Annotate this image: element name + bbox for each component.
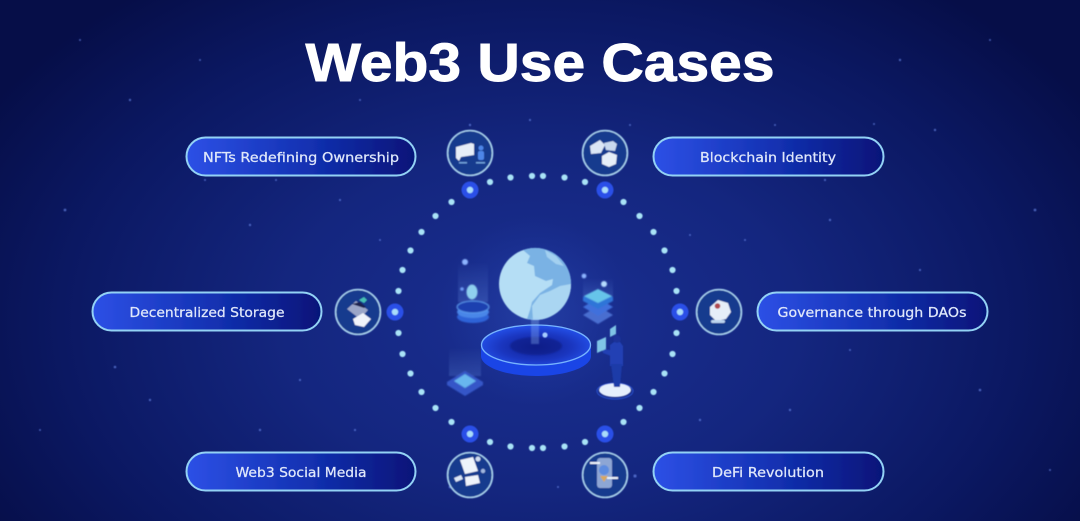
pill: Blockchain Identity: Blockchain Identity: [700, 151, 836, 166]
icon: blockchain cubes: [582, 130, 628, 176]
platform: [481, 325, 591, 376]
halo: [440, 215, 630, 405]
pill: Decentralized Storage: [92, 292, 322, 330]
pill: DeFi Revolution: [654, 452, 884, 490]
light beam: [531, 318, 539, 344]
central illustration: [440, 215, 633, 405]
pill: Blockchain Identity: [654, 138, 884, 176]
icon: NFT artwork: [448, 130, 492, 176]
icon: storage documents: [336, 290, 380, 334]
pill: NFTs Redefining Ownership: [186, 138, 416, 176]
pill: Web3 Social Media: [186, 452, 416, 490]
globe: [499, 248, 571, 320]
icon: DAO robot: [696, 290, 742, 334]
pill: Web3 Social Media: Web3 Social Media: [236, 466, 366, 481]
pill: DeFi Revolution: DeFi Revolution: [712, 466, 824, 481]
pill: NFTs Redefining Ownership: NFTs Redefining Ownership: [203, 151, 399, 166]
ring nodes: [386, 182, 688, 442]
pill: Governance through DAOs: [758, 292, 988, 330]
coin stack with fingerprint: [457, 259, 489, 323]
icon: social media cards: [448, 452, 492, 498]
icon: DeFi phone: [582, 452, 628, 498]
person on pedestal: [597, 325, 633, 399]
pill: Governance through DAOs: Governance through DAOs: [778, 306, 967, 321]
pill: Decentralized Storage: Decentralized Storage: [130, 306, 284, 321]
dotted ring: [395, 173, 680, 451]
chip: [447, 348, 483, 396]
sparkle: [542, 332, 548, 338]
server layers: [582, 274, 613, 324]
title: Web3 Use Cases: [306, 33, 774, 93]
